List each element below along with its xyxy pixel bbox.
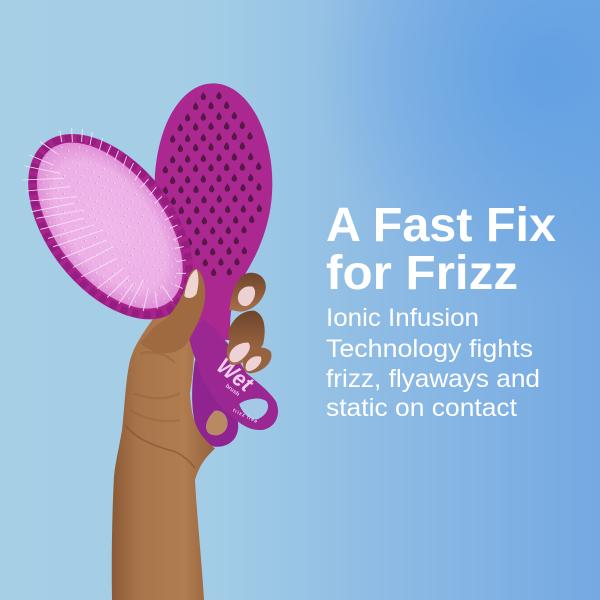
hand: thumb and fingers — [140, 269, 271, 373]
logo text: Wet — [212, 352, 259, 397]
logo text: brush — [224, 383, 241, 398]
headline: A Fast Fix — [326, 199, 556, 252]
body copy — [326, 304, 540, 422]
back brush: vented head — [155, 83, 272, 340]
headline: for Frizz — [326, 247, 518, 300]
middle finger — [227, 311, 265, 365]
back brush: lower handle with loop — [192, 360, 238, 447]
index finger — [229, 273, 266, 312]
bristles — [23, 128, 186, 311]
front brush: paddle head — [0, 104, 226, 350]
cushion pad — [8, 117, 211, 335]
body copy: static on contact — [326, 394, 517, 422]
thumb — [140, 269, 205, 353]
front brush: handle with logo — [189, 319, 278, 430]
hand: palm and wrist — [112, 316, 215, 600]
body copy: frizz, flyaways and — [326, 365, 540, 393]
body copy: Ionic Infusion — [326, 304, 479, 332]
body copy: Technology fights — [326, 335, 533, 363]
front brush: handle with logo: frizz free — [232, 408, 258, 425]
ring finger — [243, 348, 271, 373]
vent holes — [163, 91, 262, 276]
headline — [326, 199, 556, 300]
